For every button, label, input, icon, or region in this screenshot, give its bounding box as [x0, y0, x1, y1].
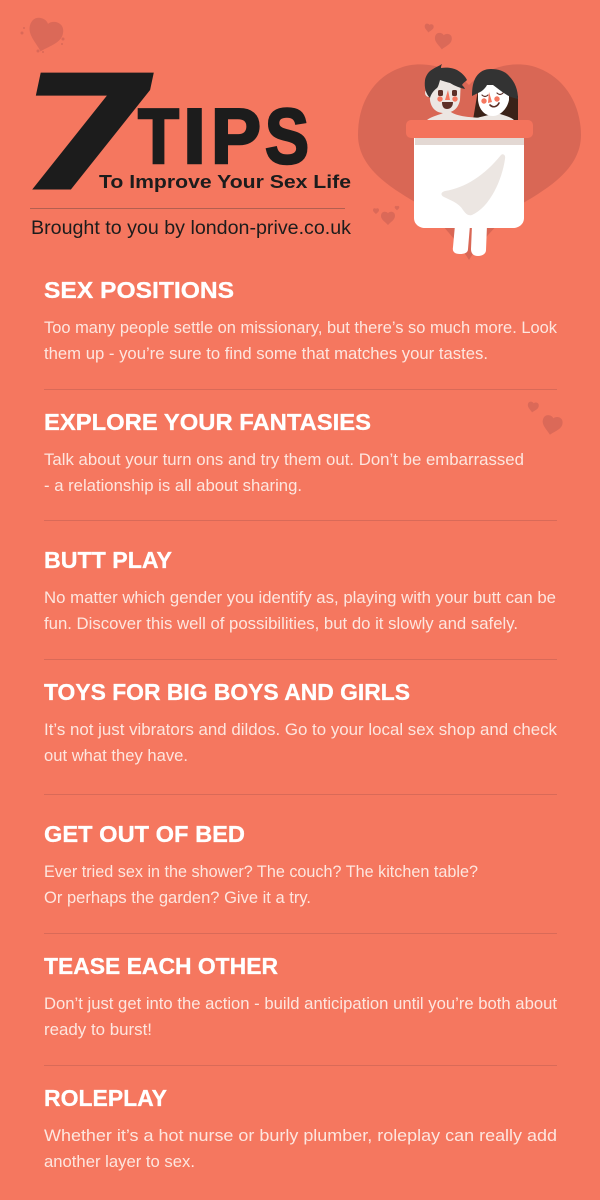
blanket: [414, 136, 524, 228]
tip: toys for big boys and girls: TOYS FOR BIG BOYS AND GIRLS: [44, 679, 410, 705]
tip: explore your fantasies: EXPLORE YOUR FANTASIES: [44, 409, 371, 435]
tip: explore your fantasies: Talk about your turn ons and try them out. Don’t be embarrassed: [44, 451, 524, 469]
header rule: [30, 208, 345, 210]
tip: tease each other: ready to burst!: [44, 1021, 152, 1039]
tip: roleplay: ROLEPLAY: [44, 1085, 167, 1111]
blanket shadow band: [415, 138, 524, 145]
tip: tease each other: Don’t just get into the action - build anticipation until you’re both about: [44, 995, 557, 1013]
tip: explore your fantasies: - a relationship is all about sharing.: [44, 477, 302, 495]
tip: tease each other: TEASE EACH OTHER: [44, 953, 278, 979]
tip: sex positions: them up - you’re sure to find some that matches your tastes.: [44, 345, 488, 363]
man: [425, 64, 490, 122]
title word TIPS: I: [183, 92, 206, 180]
tip: butt play: BUTT PLAY: [44, 547, 172, 573]
subtitle: To Improve Your Sex Life: [99, 172, 351, 192]
tip: roleplay: Whether it’s a hot nurse or burly plumber, roleplay can really add: [44, 1127, 557, 1145]
icon: top-left heart with dots: [20, 16, 65, 56]
woman: [472, 69, 518, 122]
tip: tease each other: [44, 953, 557, 1039]
icon: mid-right hearts: [527, 401, 564, 437]
floating hearts: [373, 23, 452, 225]
tip: roleplay: another layer to sex.: [44, 1153, 195, 1171]
blanket cuff: [406, 120, 533, 138]
tip: sex positions: SEX POSITIONS: [44, 277, 234, 303]
tip: toys for big boys and girls: It’s not just vibrators and dildos. Go to your local sex shop and check: [44, 721, 558, 739]
title word TIPS: [138, 92, 309, 180]
title word TIPS: P: [211, 92, 261, 180]
title word TIPS: S: [265, 92, 309, 180]
tip: butt play: No matter which gender you identify as, playing with your butt can be: [44, 589, 556, 607]
blanket fold: [441, 154, 505, 215]
tip: toys for big boys and girls: [44, 679, 558, 765]
tip: get out of bed: Or perhaps the garden? Give it a try.: [44, 889, 311, 907]
tip: get out of bed: GET OUT OF BED: [44, 821, 245, 847]
tip: butt play: fun. Discover this well of possibilities, but do it slowly and safely.: [44, 615, 518, 633]
title word TIPS: T: [138, 92, 179, 180]
tip: toys for big boys and girls: out what they have.: [44, 747, 188, 765]
tip: explore your fantasies: [44, 409, 524, 495]
tip: butt play: [44, 547, 556, 633]
tip: get out of bed: Ever tried sex in the shower? The couch? The kitchen table?: [44, 863, 478, 881]
tip: sex positions: [44, 277, 558, 363]
byline: Brought to you by london-prive.co.uk: [31, 218, 352, 239]
tip: get out of bed: [44, 821, 478, 907]
legs: [453, 225, 487, 256]
tip: sex positions: Too many people settle on missionary, but there’s so much more. Look: [44, 319, 558, 337]
tip: roleplay: [44, 1085, 557, 1171]
title block: [0, 42, 351, 227]
large heart: [358, 64, 581, 260]
title numeral 7: 7: [0, 42, 176, 227]
illustration: couple in bed: [358, 23, 581, 260]
